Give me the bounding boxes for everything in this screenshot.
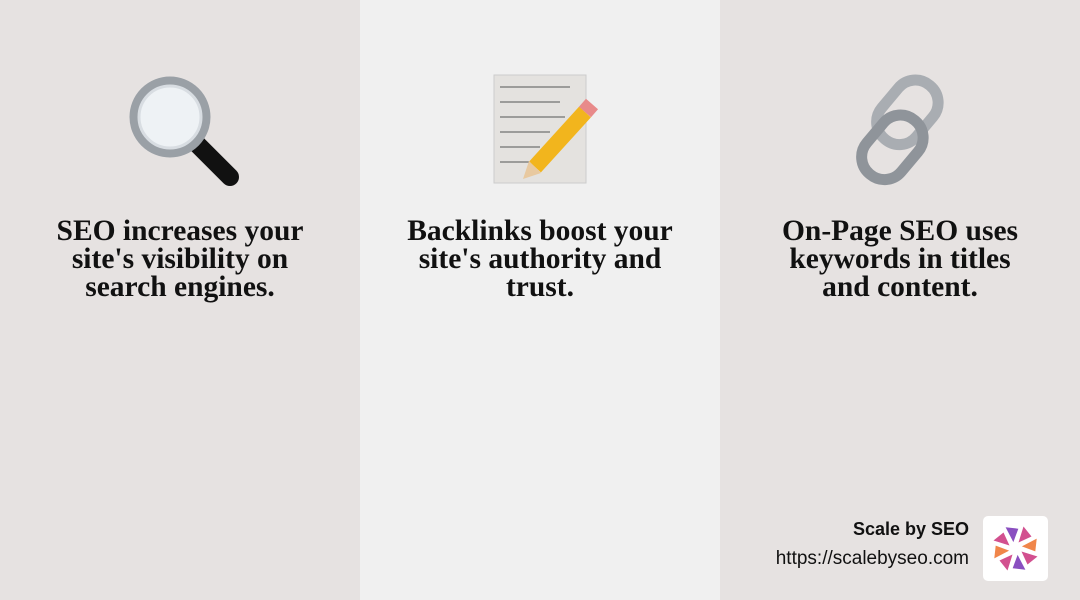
text: on-page SEO: On-Page SEO uses keywords in titles and content.: [782, 215, 1018, 303]
brand name: Scale by SEO: [853, 519, 969, 539]
icon: magnifying glass: [130, 76, 239, 186]
brand block: [776, 516, 1048, 581]
panel: right: [720, 0, 1080, 600]
icon: chain link: [856, 74, 944, 186]
text: backlinks: Backlinks boost your site's authority and trust.: [407, 215, 673, 303]
text: SEO visibility: SEO increases your site's visibility on search engines.: [57, 215, 303, 303]
icon: memo pencil: [494, 74, 598, 184]
brand url: https://scalebyseo.com: [776, 548, 969, 569]
panel: left: [0, 0, 360, 600]
logo: [983, 516, 1048, 581]
panel: middle: [360, 0, 720, 600]
